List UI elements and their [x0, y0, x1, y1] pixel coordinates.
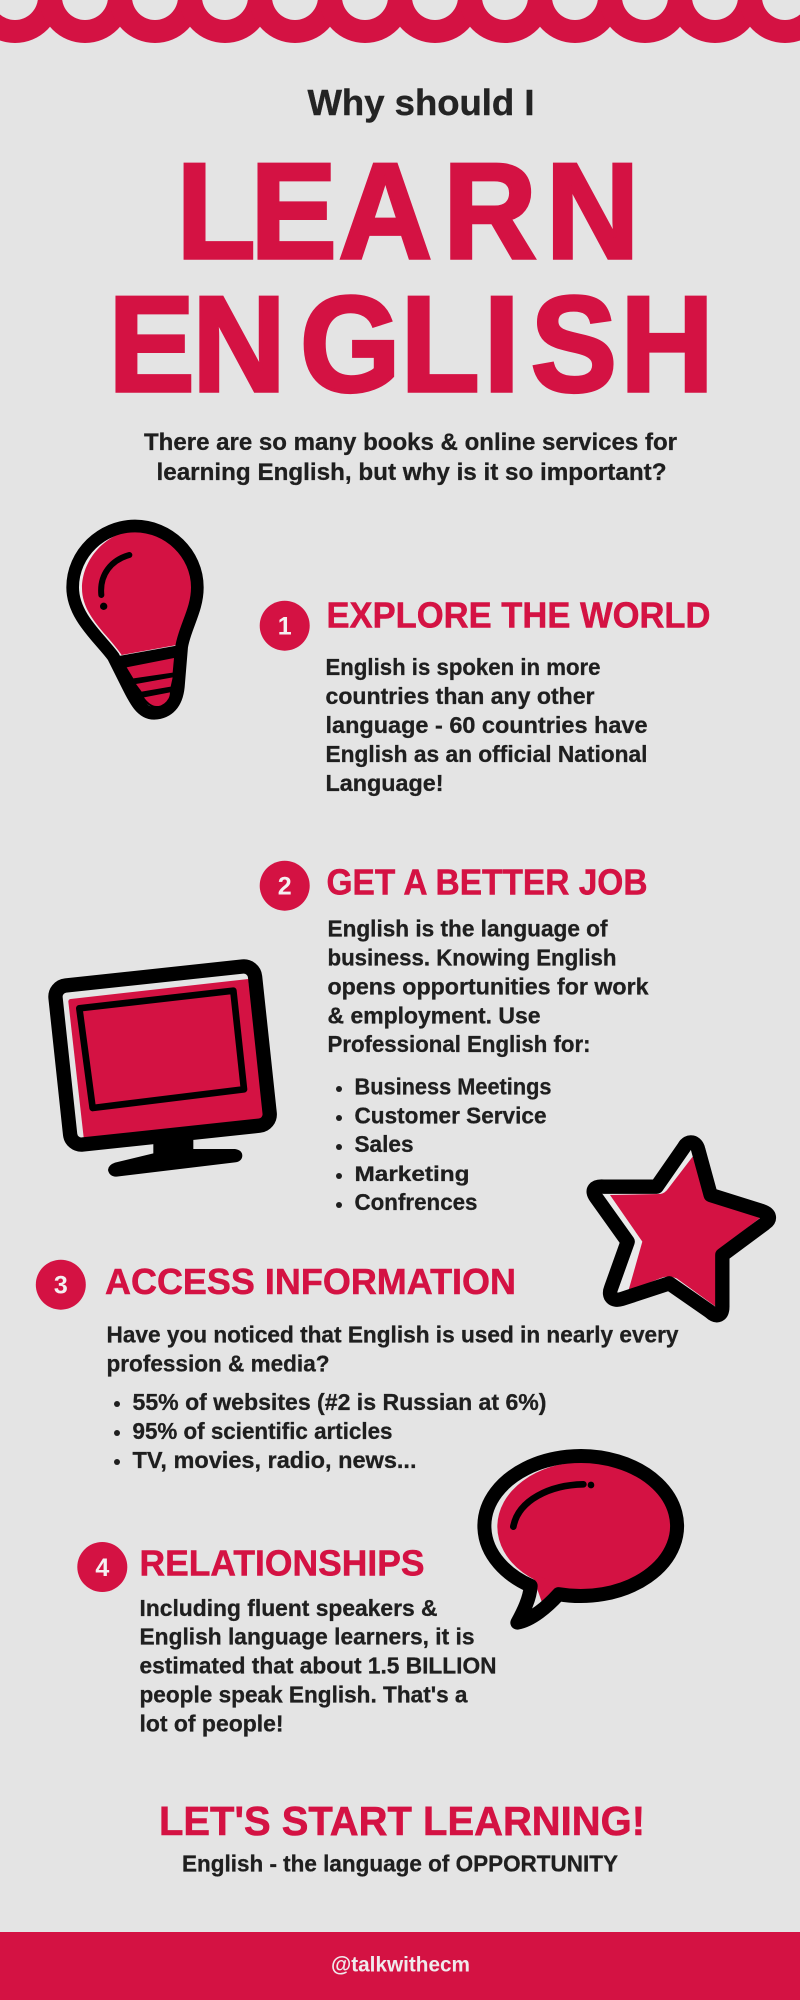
body 1: countries than any other — [326, 683, 595, 709]
closing subheading: English - the language of OPPORTUNITY — [182, 1851, 618, 1877]
list 2: Confrences — [354, 1189, 478, 1215]
number badge 3 — [36, 1260, 86, 1310]
closing heading: LET'S START LEARNING! — [159, 1798, 645, 1844]
section 1: explore the world — [260, 595, 710, 796]
body 2 — [328, 916, 649, 1057]
list 3: 95% of scientific articles — [132, 1418, 392, 1444]
body 1 — [326, 654, 648, 796]
body 4: people speak English. That's a — [140, 1681, 468, 1707]
heading 3: ACCESS INFORMATION — [105, 1261, 516, 1302]
footer handle: @talkwithecm — [331, 1953, 470, 1976]
list 2: Marketing — [354, 1162, 470, 1186]
icon: monitor — [54, 965, 271, 1177]
heading 4: RELATIONSHIPS — [140, 1543, 424, 1584]
closing call to action — [159, 1798, 645, 1877]
number badge 3: 3 — [54, 1272, 68, 1300]
body 4: Including fluent speakers & — [140, 1595, 438, 1621]
body 1: language - 60 countries have — [326, 712, 648, 738]
icon: star — [594, 1142, 769, 1315]
list 3: 55% of websites (#2 is Russian at 6%) — [132, 1389, 546, 1415]
body 3 — [106, 1321, 679, 1377]
intro text: learning English, but why is it so important? — [156, 459, 666, 486]
number badge 4 — [77, 1542, 127, 1592]
body 3: profession & media? — [106, 1351, 330, 1377]
heading 1: EXPLORE THE WORLD — [326, 595, 710, 636]
body 2: English is the language of — [328, 916, 608, 942]
title block — [108, 82, 714, 421]
list 2: Business Meetings — [354, 1073, 552, 1099]
number badge 2 — [260, 861, 310, 911]
body 4: lot of people! — [140, 1710, 284, 1736]
section 3: access information — [36, 1260, 679, 1473]
list 3: TV, movies, radio, news... — [132, 1447, 416, 1473]
body 2: Professional English for: — [328, 1031, 590, 1057]
number badge 1 — [260, 601, 310, 651]
body 1: English as an official National — [326, 741, 648, 767]
body 4 — [140, 1595, 496, 1736]
scalloped top border — [0, 0, 800, 43]
section 2: get a better job — [260, 861, 649, 1215]
number badge 1: 1 — [278, 613, 292, 641]
list 3 — [114, 1389, 546, 1473]
title: english: ENGLISH — [108, 269, 714, 421]
icon: light bulb — [73, 526, 197, 713]
title: learn: LEARN — [177, 136, 639, 288]
body 4: English language learners, it is — [140, 1624, 474, 1650]
intro text — [144, 429, 677, 486]
body 1: English is spoken in more — [326, 654, 600, 680]
number badge 2: 2 — [278, 873, 292, 901]
intro text: There are so many books & online services for — [144, 429, 677, 456]
body 2: & employment. Use — [328, 1002, 540, 1028]
body 3: Have you noticed that English is used in nearly every — [106, 1321, 679, 1347]
icon: speech bubble — [484, 1456, 677, 1623]
list 2: Customer Service — [354, 1102, 546, 1128]
list 2: Sales — [354, 1131, 414, 1157]
heading 2: GET A BETTER JOB — [326, 862, 648, 903]
body 4: estimated that about 1.5 BILLION — [140, 1653, 496, 1679]
section 4: relationships — [77, 1542, 497, 1736]
body 2: business. Knowing English — [328, 945, 616, 971]
title: why should I: Why should I — [308, 82, 534, 123]
footer bar — [0, 1932, 800, 2000]
list 2 — [336, 1073, 552, 1215]
body 1: Language! — [326, 770, 444, 796]
body 2: opens opportunities for work — [328, 973, 649, 999]
number badge 4: 4 — [95, 1554, 109, 1582]
